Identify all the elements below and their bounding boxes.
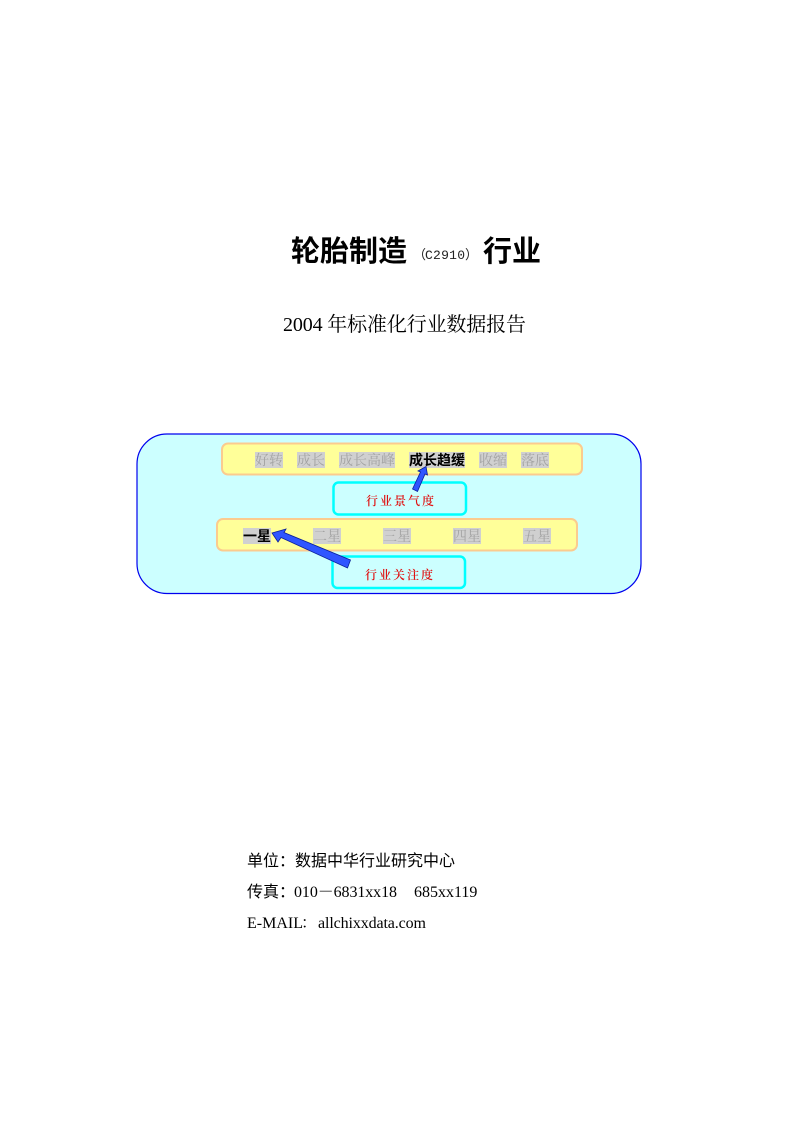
contact information: 传真： (247, 883, 295, 901)
bar: industry attention stars: 五星 (523, 529, 551, 545)
contact information: E-MAIL (247, 915, 303, 932)
title: （ (413, 248, 426, 263)
box: industry attention label (332, 556, 465, 588)
bar: industry climate stages: 成长 (297, 452, 325, 469)
bar: industry attention stars: 三星 (383, 529, 411, 545)
title: 行业 (483, 235, 541, 268)
contact information: 010－6831xx18 (294, 884, 397, 901)
bar: industry attention stars: 二星 (313, 529, 341, 545)
contact information (247, 852, 477, 932)
box: industry climate label (334, 482, 466, 514)
bar: industry attention stars: 四星 (453, 529, 481, 545)
bar: industry attention stars: 一星 (243, 528, 271, 544)
contact information: 685xx119 (414, 884, 477, 901)
bar: industry climate stages: 成长高峰 (339, 452, 395, 469)
arrow: climate pointer (412, 466, 428, 492)
contact information: ： (301, 915, 317, 932)
box: industry attention label: 行业关注度 (365, 567, 435, 582)
arrow: attention pointer (272, 529, 350, 568)
panel: industry indicators (137, 434, 641, 594)
box: industry climate label: 行业景气度 (366, 493, 436, 508)
contact information: 单位：数据中华行业研究中心 (247, 852, 455, 870)
bar: industry climate stages (222, 444, 582, 474)
title (291, 235, 541, 268)
title: C2910 (425, 248, 465, 263)
contact information: allchixxdata.com (318, 915, 427, 932)
bar: industry climate stages: 成长趋缓 (409, 452, 465, 468)
title: ） (465, 248, 478, 263)
bar: industry climate stages: 好转 (255, 453, 283, 469)
bar: industry attention stars (217, 519, 577, 550)
bar: industry climate stages: 落底 (521, 452, 549, 469)
title: 轮胎制造 (291, 235, 407, 268)
subtitle: 2004 年标准化行业数据报告 (283, 313, 526, 336)
bar: industry climate stages: 收缩 (479, 452, 507, 469)
